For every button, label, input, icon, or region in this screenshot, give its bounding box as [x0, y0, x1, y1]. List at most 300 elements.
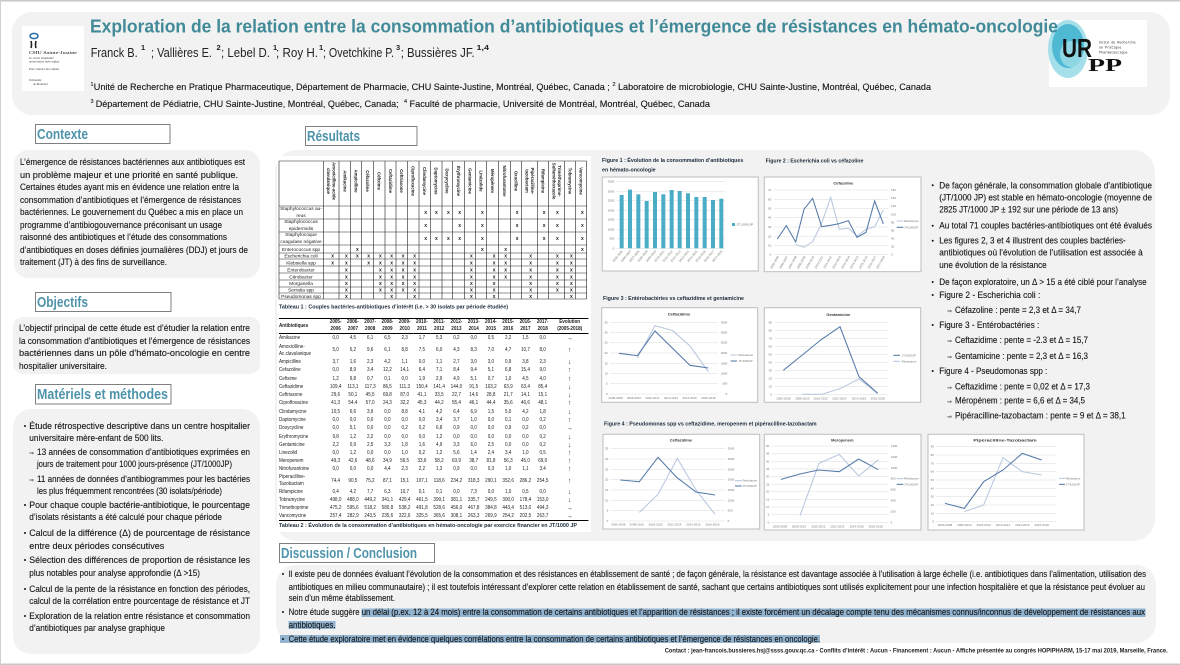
panel: methods list: jours de traitement pour 1000 jours-présence (JT/1000JP) [36, 459, 232, 469]
figure 2: Escherichia coli vs céfazoline: 2016-2017 [867, 255, 877, 270]
table 2: antibiotic consumption by fiscal year: 0,0 [401, 376, 408, 382]
chart: Ceftazidime: 25 [605, 467, 609, 471]
chart: Ceftazidime: 1500 [721, 361, 728, 365]
table 2: antibiotic consumption by fiscal year: 3,9 [367, 408, 373, 414]
table 2: antibiotic consumption by fiscal year: 4,4 [384, 466, 391, 472]
table 2: antibiotic consumption by fiscal year: → [567, 425, 573, 432]
table 2: antibiotic consumption by fiscal year: 202,5 [520, 513, 531, 519]
legend: Résistance [904, 219, 919, 223]
table 2: antibiotic consumption by fiscal year: 0,0 [332, 417, 339, 423]
table 2: antibiotic consumption by fiscal year: 0,1 [436, 489, 442, 495]
panel: Contexte text [14, 150, 260, 278]
chart: Ceftazidime: 3000 [728, 457, 735, 461]
table 2: antibiotic consumption by fiscal year: 4,2 [436, 408, 442, 414]
results key findings list: De façon exploratoire, un Δ > 15 a été ciblé pour l’analyse [939, 277, 1147, 287]
table 2: antibiotic consumption by fiscal year: 0,0 [539, 335, 546, 341]
chart: Pipéracilline-Tazobactam: 50 [931, 478, 934, 482]
table 2: antibiotic consumption by fiscal year: 1,5 [522, 335, 529, 341]
chart: Gentamicine: 70 [769, 336, 772, 340]
table 2: antibiotic consumption by fiscal year: 429,4 [399, 497, 410, 503]
panel: methods list: Pour chaque couple bactérie-antibiotique, le pourcentage [29, 500, 250, 510]
authors: 1 [319, 43, 323, 52]
table 2: antibiotic consumption by fiscal year: 74,4 [331, 478, 340, 484]
x marks grid [331, 210, 584, 300]
y axis labels: 1500 [608, 218, 615, 222]
table 2: antibiotic consumption by fiscal year: 2016 [503, 326, 513, 332]
chart: Ceftazidime: 2016-2018 [705, 522, 720, 526]
results key findings list: antibiotiques où l’évolution de l’utilisation est associée à [939, 248, 1143, 258]
table 2: antibiotic consumption by fiscal year: 4,2 [522, 408, 529, 414]
table 2: antibiotic consumption by fiscal year: 8,0 [539, 347, 546, 353]
figure 1: consumption bar chart [602, 156, 758, 271]
figure 2: Escherichia coli vs céfazoline: 100 [891, 212, 896, 216]
chart: Meropenem: 30 [766, 475, 770, 479]
antibiotic column headers: Oxacilline [514, 171, 518, 192]
chart: Meropenem: 800 [891, 477, 896, 481]
table 2: antibiotic consumption by fiscal year: 528,6 [433, 505, 445, 511]
bacteria row labels: Morganella [289, 281, 313, 287]
chart: Ceftazidime: 35 [605, 447, 609, 451]
chart: Gentamicine: 30 [769, 368, 772, 372]
bacteria row labels: coagulase négative [280, 239, 322, 245]
y axis labels: 500 [609, 237, 615, 241]
panel: discussion text: Notre étude suggère [289, 607, 360, 617]
figure 1 caption [602, 156, 743, 174]
results key findings list: De façon générale, la consommation globale d’antibiotique [939, 180, 1152, 190]
x marks grid: xxxxxxxxx [424, 210, 584, 216]
panel: methods list: Calcul de la différence (Δ) de pourcentage de résistance [29, 528, 250, 538]
table 2: antibiotic consumption by fiscal year: 2,2 [367, 434, 373, 440]
table 2: antibiotic consumption by fiscal year: 0,0 [332, 466, 339, 472]
chart: Gentamicine: 50 [769, 352, 772, 356]
table 2: antibiotic consumption by fiscal year: 8,4 [453, 367, 460, 373]
chart: Meropenem: 2008-2010 [792, 524, 806, 528]
table 2: antibiotic consumption by fiscal year: 456,0 [451, 505, 462, 511]
table 2: antibiotic consumption by fiscal year: 308,1 [451, 513, 462, 519]
chart: Gentamicine: Gentamicine [826, 312, 851, 317]
chart: Ceftazidime: Résistance [738, 353, 753, 357]
table 2: antibiotic consumption by fiscal year: 7,3 [470, 489, 477, 495]
table 2: antibiotic consumption by fiscal year: 2,2 [505, 335, 511, 341]
chart: Gentamicine: 10 [769, 384, 772, 388]
table 2: antibiotic consumption by fiscal year: 5,1 [488, 367, 494, 373]
table 2: antibiotic consumption by fiscal year: 2006 [331, 326, 341, 332]
table 2: antibiotic consumption by fiscal year: 0,7 [367, 376, 373, 382]
affiliations: 1 [90, 82, 94, 88]
table 2: antibiotic consumption by fiscal year: Clindamycine [279, 408, 307, 414]
table 2: antibiotic consumption by fiscal year: 325,5 [416, 513, 428, 519]
x axis labels: 2011-2012 [662, 249, 674, 263]
table 2: antibiotic consumption by fiscal year: 4,2 [384, 358, 391, 364]
figure 2: Escherichia coli vs céfazoline: 2017-2018 [875, 255, 886, 270]
affiliations: Laboratoire de microbiologie, CHU Sainte-Justine, Montréal, Québec, Canada [618, 82, 932, 92]
table 2: antibiotic consumption by fiscal year: 0,0 [539, 489, 546, 495]
table 2: antibiotic consumption by fiscal year: 318,3 [468, 478, 479, 484]
table 2: antibiotic consumption by fiscal year: Amoxicilline- [279, 344, 305, 350]
table 2: antibiotic consumption by fiscal year: 7,0 [488, 347, 494, 353]
results key findings list: ⇒ [947, 386, 952, 392]
figure 2: Escherichia coli vs céfazoline: Céfazoline [833, 181, 854, 186]
chart: Ceftazidime: 2012-2014 [664, 396, 678, 400]
results key findings list: ⇒ [947, 309, 952, 315]
table 2: antibiotic consumption by fiscal year: ↑ [568, 450, 571, 457]
figure 2: Escherichia coli vs céfazoline: 50 [768, 206, 772, 210]
table 2: antibiotic consumption by fiscal year: 2010 [400, 326, 410, 332]
logo: CHU Sainte-Justine: de Montréal [33, 82, 48, 86]
chart: Meropenem [764, 434, 921, 530]
table 2: antibiotic consumption by fiscal year: 0,9 [505, 358, 511, 364]
table 2: antibiotic consumption by fiscal year: 4,5 [522, 376, 529, 382]
table 2: antibiotic consumption by fiscal year: 49,3 [331, 458, 340, 464]
table 2: antibiotic consumption by fiscal year: ↑ [568, 417, 571, 424]
antibiotic column headers: Amikacine [342, 170, 348, 192]
table 2: antibiotic consumption by fiscal year: 21,7 [504, 392, 513, 398]
legend [732, 223, 753, 227]
table 2: antibiotic consumption by fiscal year: 6,2 [350, 347, 356, 353]
table 2: antibiotic consumption by fiscal year: 0,0 [384, 408, 391, 414]
chart: Ceftazidime: 2006-2008 [609, 396, 623, 400]
table 2: antibiotic consumption by fiscal year: 2015- [502, 319, 514, 325]
chart: Ceftazidime: 1500 [728, 488, 735, 492]
chart: Ceftazidime: 0 [726, 392, 728, 396]
chart: Meropenem: 2012-2014 [830, 524, 845, 528]
table 2: antibiotic consumption by fiscal year: 4,0 [539, 376, 546, 382]
results key findings list: Céfazoline : pente = 2,3 et Δ = 34,7 [955, 305, 1081, 315]
table 2: antibiotic consumption by fiscal year: 0,0 [470, 466, 477, 472]
heading: Contexte: Contexte [37, 127, 88, 143]
figure 2: Escherichia coli vs céfazoline: 2007-2008 [787, 255, 798, 270]
panel: methods list: 11 années de données d’antibiogrammes pour les bactéries [37, 474, 250, 484]
table 2: antibiotic consumption by fiscal year: 1,0 [505, 466, 511, 472]
panel: Objectifs text: L’objectif principal de cette étude est d’étudier la relation entre [19, 323, 250, 333]
panel: Contexte text: programme d’antibiogouvernance préconisant un usage [20, 220, 222, 230]
table 2: antibiotic consumption by fiscal year: 341,1 [382, 497, 393, 503]
table 2: antibiotic consumption by fiscal year: 87,1 [383, 478, 392, 484]
table 2: antibiotic consumption by fiscal year: 3,0 [470, 358, 477, 364]
figure 2: Escherichia coli vs céfazoline: 20 [891, 245, 895, 249]
panel: Contexte text: consommation d’antibiotiques et l’émergence de résistances [20, 195, 241, 205]
antibiotic column headers: Érythromycine [456, 166, 461, 197]
table 2: antibiotic consumption by fiscal year: 1,0 [505, 489, 511, 495]
table 2: antibiotic consumption by fiscal year: 1,3 [436, 466, 442, 472]
chart: Meropenem: 400 [891, 499, 896, 503]
chart: Ceftazidime: 1000 [721, 372, 728, 376]
table 2: antibiotic consumption by fiscal year: 0,9 [453, 425, 460, 431]
table 2: antibiotic consumption by fiscal year: 91,5 [469, 384, 478, 390]
table 2 caption: Tableau 2 : Évolution de la consommation d’antibiotiques en hémato-oncologie par exercice financier en JT/1000 JP [279, 521, 577, 529]
x marks grid: xxxx [356, 247, 584, 253]
chart: Pipéracilline-Tazobactam: Pipéracilline-Tazobactam [973, 437, 1037, 442]
table 2: antibiotic consumption by fiscal year: Ceftazidime [279, 384, 303, 390]
chart: Meropenem: 1200 [891, 455, 898, 459]
table 2: antibiotic consumption by fiscal year: 365,6 [433, 513, 445, 519]
series: JT/1000JP [777, 198, 883, 242]
chart: Pipéracilline-Tazobactam: 40 [931, 486, 934, 490]
table 2: antibiotic consumption by fiscal year: 5,1 [470, 376, 477, 382]
panel: methods list: ⇒ [29, 451, 34, 457]
table 2: antibiotic consumption by fiscal year: 1,6 [419, 442, 425, 448]
table 2: antibiotic consumption by fiscal year: 2017- [537, 319, 549, 325]
authors: ; Ovetchkine P. [323, 46, 394, 60]
table 2: antibiotic consumption by fiscal year: 3,4 [505, 450, 511, 456]
figure 3: Entérobactéries charts [602, 296, 921, 402]
antibiotic column headers: Linézolide [478, 170, 484, 192]
panel: methods list: calcul de la corrélation entre pourcentage de résistance et JT [29, 596, 250, 606]
y axis labels: 3000 [608, 189, 615, 193]
heading: Matériels et méthodes: Matériels et méthodes [37, 387, 168, 403]
table 2: antibiotic consumption by fiscal year: 595,6 [347, 505, 359, 511]
chart: Pipéracilline-Tazobactam: Résistance [1066, 476, 1081, 480]
table 2: antibiotic consumption by fiscal year: 4,3 [453, 347, 460, 353]
logo: URPP: Unité de Recherche [1099, 40, 1136, 46]
table 2: antibiotic consumption by fiscal year: 117,3 [365, 384, 376, 390]
table 2: antibiotic consumption by fiscal year: 1,6 [350, 358, 356, 364]
table 2: antibiotic consumption by fiscal year: 0,0 [453, 489, 460, 495]
table 2: antibiotic consumption by fiscal year: 5,1 [350, 425, 356, 431]
chart: Meropenem: 45 [766, 452, 770, 456]
table 2: antibiotic consumption by fiscal year: ↑ [568, 367, 571, 374]
panel: methods list: d’isolats résistants a été calculé pour chaque période [29, 512, 222, 522]
table 2: antibiotic consumption by fiscal year: 28,8 [486, 392, 495, 398]
authors: ; Bussières JF. [401, 46, 475, 60]
table 2: antibiotic consumption by fiscal year: (2005-2018) [557, 326, 582, 332]
table 2: antibiotic consumption by fiscal year: Cefazoline [279, 367, 301, 373]
table 2: antibiotic consumption by fiscal year: 0,0 [367, 450, 373, 456]
table 2: antibiotic consumption by fiscal year: 90,5 [348, 478, 357, 484]
table 2: antibiotic consumption by fiscal year: 2005- [330, 319, 342, 325]
panel: methods list [13, 409, 260, 654]
table 2: antibiotic consumption by fiscal year: 56,5 [400, 458, 409, 464]
panel: methods list: ⇒ [29, 478, 34, 484]
results key findings list: 2825 JT/1000 JP ± 192 sur une période de 13 ans) [939, 204, 1118, 214]
table 2: antibiotic consumption by fiscal year: 85,4 [538, 384, 547, 390]
table 2: antibiotic consumption by fiscal year: ↑ [568, 400, 571, 407]
bacteria row labels: Staphylocoque [285, 232, 317, 238]
table 2: antibiotic consumption by fiscal year: 475,2 [330, 505, 341, 511]
table 2: antibiotic consumption by fiscal year: 32,2 [400, 400, 409, 406]
antibiotic column headers: Ceftazidime [388, 169, 393, 194]
chart: Gentamicine: 90 [769, 320, 772, 324]
chart: Pipéracilline-Tazobactam: 2006-2008 [938, 523, 952, 527]
panel: methods list: les plus fréquemment rencontrées (30 isolats/période) [37, 486, 222, 496]
figure 2 caption: Figure 2 : Escherichia coli vs céfazoline [766, 158, 863, 164]
table 2: antibiotic consumption by fiscal year: 0,9 [453, 466, 460, 472]
table 2: antibiotic consumption by fiscal year: 0,2 [419, 425, 425, 431]
x marks grid: xxxxxxxxxxxxx [331, 260, 573, 266]
chart: Ceftazidime: 15 [604, 361, 608, 365]
authors: 2 [216, 43, 221, 52]
table 2: antibiotic consumption by fiscal year: ↓ [568, 434, 571, 440]
chart: Meropenem: JT/1000JP [904, 482, 918, 486]
y axis labels: 2500 [608, 199, 615, 203]
table 2: antibiotic consumption by fiscal year: 7,1 [436, 367, 442, 373]
table 2: antibiotic consumption by fiscal year: ↑ [568, 466, 571, 473]
table 2: antibiotic consumption by fiscal year: 6,4 [419, 367, 425, 373]
panel: Contexte text: d’antibiotiques en doses définies journalières (DDJ) et jours de [20, 245, 248, 255]
table 2: antibiotic consumption by fiscal year: 22,7 [452, 392, 461, 398]
table 2: antibiotic consumption by fiscal year: 282,9 [347, 513, 359, 519]
panel: methods list: Exploration de la relation entre résistance et consommation [29, 611, 250, 621]
table 2: antibiotic consumption by fiscal year: 0,5 [488, 335, 494, 341]
antibiotic column headers: Pipéracilline- [530, 168, 535, 195]
table 2: antibiotic consumption by fiscal year: 3,7 [453, 417, 460, 423]
figure 2: Escherichia coli vs céfazoline: 20 [768, 234, 772, 238]
table 2: antibiotic consumption by fiscal year: 6,0 [470, 442, 477, 448]
table 2: antibiotic consumption by fiscal year: 518,2 [364, 505, 376, 511]
x marks grid: xxxxxxx [424, 223, 584, 229]
chart: Meropenem: 1000 [891, 466, 898, 470]
table 2: antibiotic consumption by fiscal year: Ac.clavulanique [279, 350, 311, 356]
y axis labels: 1000 [608, 227, 615, 231]
table 2: antibiotic consumption by fiscal year: 0,1 [505, 417, 511, 423]
bacteria row labels: reus [296, 213, 306, 219]
chart: Ceftazidime: Ceftazidime [670, 437, 693, 442]
table 2: antibiotic consumption by fiscal year: 0,0 [488, 417, 494, 423]
chart: Meropenem: Résistance [904, 477, 919, 481]
table 2: antibiotic consumption by fiscal year: 10,7 [400, 489, 409, 495]
table 2: antibiotic consumption by fiscal year: 300,0 [502, 497, 514, 503]
table 2: antibiotic consumption by fiscal year: 1,0 [522, 450, 529, 456]
antibiotic column headers: Ceftriaxone [399, 169, 404, 193]
chart: Ceftazidime: 2500 [728, 467, 735, 471]
results key findings list: (JT/1000 JP) est stable en hémato-oncologie (moyenne de [939, 192, 1152, 202]
table 2: antibiotic consumption by fiscal year: 384,8 [485, 505, 497, 511]
chart: Gentamicine [764, 308, 921, 402]
table 2: antibiotic consumption by fiscal year: 0,0 [539, 425, 546, 431]
table 2: antibiotic consumption by fiscal year: 2,3 [401, 335, 408, 341]
table 2: antibiotic consumption by fiscal year: 3,4 [367, 367, 373, 373]
table 2: antibiotic consumption by fiscal year: 113,1 [347, 384, 358, 390]
table 2: antibiotic consumption by fiscal year: Antibiotiques [279, 322, 308, 328]
chart: Meropenem: 2014-2016 [850, 524, 864, 528]
results key findings list: une évolution de la résistance [939, 260, 1047, 270]
table 2: antibiotic consumption by fiscal year: 4,2 [350, 489, 356, 495]
table 2: antibiotic consumption by fiscal year: 2009 [382, 326, 393, 332]
panel: Contexte text: L’émergence de résistances bactériennes aux antibiotiques est [20, 157, 245, 167]
chart: Ceftazidime: 30 [605, 457, 609, 461]
antibiotic column headers: Sulfaméthoxazole [552, 163, 556, 200]
table 2: antibiotic consumption by fiscal year: 44,2 [435, 400, 444, 406]
table 2: antibiotic consumption by fiscal year: ↓ [568, 497, 571, 504]
chart: Gentamicine: 2012-2014 [832, 397, 847, 401]
table 2: antibiotic consumption by fiscal year: 381,1 [451, 497, 462, 503]
chart: Ceftazidime: 25 [604, 341, 608, 345]
table 2: antibiotic consumption by fiscal year: 0,2 [453, 335, 460, 341]
table 2: antibiotic consumption by fiscal year: 7,5 [419, 347, 425, 353]
legend [897, 219, 919, 229]
table 2: antibiotic consumption by fiscal year: 42,6 [348, 458, 357, 464]
table 2: antibiotic consumption by fiscal year: 15,1 [538, 392, 547, 398]
table 2: antibiotic consumption by fiscal year: 6,4 [453, 408, 460, 414]
table 2: antibiotic consumption by fiscal year: 254,2 [502, 513, 514, 519]
table 2: antibiotic consumption by fiscal year: 2016- [520, 319, 531, 325]
chart: Ceftazidime: 2010-2012 [649, 522, 663, 526]
table 2: antibiotic consumption by fiscal year: 8,8 [401, 408, 408, 414]
table 2: antibiotic consumption by fiscal year: 5,3 [436, 335, 442, 341]
results key findings list: Gentamicine : pente = 2,3 et Δ = 16,3 [955, 351, 1088, 361]
figure 2: Escherichia coli vs céfazoline: 160 [891, 188, 896, 192]
table 2: antibiotic consumption by fiscal year: 461,5 [416, 497, 428, 503]
table 2: antibiotic consumption by fiscal year: 0,0 [470, 335, 477, 341]
figure 2: Escherichia coli vs céfazoline: 2005-2006 [769, 255, 780, 270]
table 2: antibiotic consumption by fiscal year: 46,1 [469, 400, 478, 406]
table 2: antibiotic consumption by fiscal year: 2,2 [419, 466, 425, 472]
table 2: antibiotic consumption by fiscal year: Gentamicine [279, 442, 305, 448]
table 2: antibiotic consumption by fiscal year: 0,0 [522, 442, 529, 448]
authors [91, 43, 490, 60]
panel: Contexte text: un problème majeur et une priorité en santé publique. [20, 170, 238, 180]
section: Discussion / Conclusion [276, 544, 1168, 654]
table 2: antibiotic consumption by fiscal year: 2010- [416, 319, 428, 325]
affiliations: Département de Pédiatrie, CHU Sainte-Justine, Montréal, Québec, Canada; [96, 99, 399, 109]
table 2: antibiotic consumption by fiscal year: Rifampicine [279, 489, 303, 495]
table 2: antibiotic consumption by fiscal year: 234,2 [451, 478, 462, 484]
panel: methods list: Étude rétrospective descriptive dans un centre hospitalier [29, 421, 250, 431]
table 2: antibiotic consumption by fiscal year: 141,4 [433, 384, 445, 390]
table 2: antibiotic consumption by fiscal year: 2015 [486, 326, 496, 332]
chart: Gentamicine: 40 [769, 360, 772, 364]
authors: ; Roy H. [276, 46, 318, 60]
panel: methods list: Calcul de la pente de la résistance en fonction des périodes, [29, 584, 250, 594]
results key findings list: Les figures 2, 3 et 4 illustrent des couples bactéries- [939, 236, 1126, 246]
figure 2: Escherichia coli vs céfazoline: 2011-2012 [822, 255, 833, 269]
table 2: antibiotic consumption by fiscal year: 1,8 [539, 408, 546, 414]
table 2: antibiotic consumption by fiscal year: 9,0 [539, 367, 546, 373]
chart: Ceftazidime: 10 [605, 498, 609, 502]
heading: Résultats: Résultats [307, 129, 360, 145]
antibiotic column headers: Triméthoprime- [557, 165, 562, 197]
antibiotic column headers: Ciprofloxacine [410, 166, 416, 197]
table 1: bacteria-antibiotic pairs [277, 156, 591, 532]
table 2: antibiotic consumption by fiscal year: 44,4 [486, 400, 495, 406]
chart: Ceftazidime: 0 [607, 519, 609, 523]
x axis labels: 2010-2011 [653, 249, 666, 263]
table 2: antibiotic consumption by fiscal year: 0,0 [332, 367, 339, 373]
legend: JT/1000JP [904, 225, 918, 229]
table 2: antibiotic consumption by fiscal year: 75,2 [366, 478, 375, 484]
figure 2: Escherichia coli vs céfazoline: 2010-2011 [814, 255, 824, 269]
table 2: antibiotic consumption by fiscal year: 580,8 [382, 505, 393, 511]
table 2: antibiotic consumption by fiscal year: 0,0 [401, 417, 408, 423]
table 2: antibiotic consumption by fiscal year: Cefixime [279, 376, 297, 382]
table 2: antibiotic consumption by fiscal year: 2008- [382, 319, 393, 325]
chart: Ceftazidime: 2010-2012 [645, 396, 660, 400]
table 2: antibiotic consumption by fiscal year: ↓ [568, 392, 571, 399]
heading: Objectifs [36, 292, 171, 312]
x axis labels: 2007-2008 [628, 249, 641, 263]
x marks grid: xxxxxxxxxxx [345, 268, 573, 274]
table 2: antibiotic consumption by fiscal year: 7,7 [367, 489, 373, 495]
figure 2: Escherichia coli vs céfazoline: 2015-2016 [858, 255, 869, 270]
table 2: antibiotic consumption by fiscal year: 0,0 [384, 450, 391, 456]
logo: URPP: UR [1062, 33, 1092, 63]
table 2: antibiotic consumption by fiscal year: 6,6 [350, 408, 356, 414]
table 2: antibiotic consumption by fiscal year: 498,0 [330, 497, 341, 503]
figure 3 caption: Figure 3 : Entérobactéries vs ceftazidime et gentamicine [603, 296, 744, 302]
panel: Contexte text: Certaines études ayant mis en évidence une relation entre la [20, 182, 240, 192]
chart: Ceftazidime: 2016-2018 [701, 396, 716, 400]
table 2: antibiotic consumption by fiscal year: 0,7 [488, 376, 494, 382]
table 2: antibiotic consumption by fiscal year: Erythromycine [279, 434, 308, 440]
table 2: antibiotic consumption by fiscal year: ↑ [568, 458, 571, 465]
chart: Ceftazidime: 2008-2010 [627, 396, 641, 400]
table 2: antibiotic consumption by fiscal year: 235,6 [382, 513, 393, 519]
chart: Pipéracilline-Tazobactam: 90 [931, 445, 934, 449]
table 2: antibiotic consumption by fiscal year: 103,2 [485, 384, 497, 390]
chart: Meropenem: 10 [766, 505, 770, 509]
table 2: antibiotic consumption by fiscal year: Meropenem [279, 458, 303, 464]
antibiotic column headers: Céfazoline [365, 170, 370, 192]
